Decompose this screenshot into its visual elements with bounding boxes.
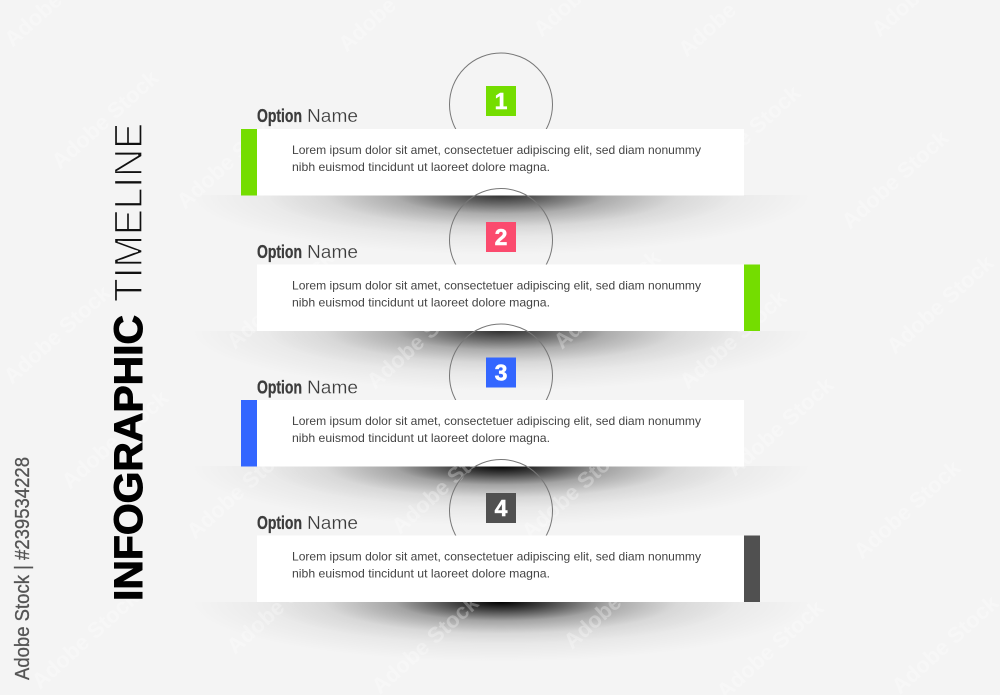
title: timeline: TIMELINE [107, 123, 151, 302]
option name 4: Name [307, 513, 358, 533]
accent 1 [241, 129, 257, 196]
step 2 [257, 188, 760, 331]
card 4 [257, 536, 744, 602]
option name 3 [257, 376, 358, 398]
watermark: Adobe Stock [559, 545, 676, 654]
option name 1: Name [307, 106, 358, 126]
badge 2: 2 [495, 224, 507, 250]
watermark: Adobe Stock [549, 245, 666, 354]
watermark: Adobe Stock [837, 125, 954, 234]
text 4: Lorem ipsum dolor sit amet, consectetuer adipiscing elit, sed diam nonummy [292, 550, 701, 564]
option name 2: Name [307, 242, 358, 262]
watermark: Adobe Stock [517, 435, 634, 544]
step 3 [241, 324, 744, 466]
option name 3: Option [257, 376, 302, 398]
step 1 [241, 53, 744, 196]
text 2: nibh euismod tincidunt ut laoreet dolore magna. [292, 296, 550, 310]
card 3 [257, 400, 744, 466]
text 2: Lorem ipsum dolor sit amet, consectetuer adipiscing elit, sed diam nonummy [292, 278, 701, 292]
accent 4 [744, 536, 760, 602]
text 1 [292, 143, 701, 174]
circle 1 [450, 53, 552, 156]
circle 3 [450, 324, 552, 427]
option name 1 [257, 105, 358, 126]
stock credit: Adobe Stock | #239534228 [12, 457, 34, 680]
card 1 [257, 129, 744, 196]
shadow: card 1 [190, 195, 812, 255]
option name 2 [257, 241, 358, 262]
watermark: Adobe Stock [0, 280, 116, 389]
title: infographic: INFOGRAPHIC [107, 315, 151, 601]
text 1: nibh euismod tincidunt ut laoreet dolore magna. [292, 160, 550, 174]
option name 2: Option [257, 241, 302, 262]
text 4 [292, 550, 701, 580]
accent 3 [241, 400, 257, 466]
badge 1: 1 [495, 88, 508, 114]
card 2 [257, 264, 744, 331]
watermark: Adobe Stock [47, 65, 164, 174]
watermark: Adobe Stock [387, 430, 504, 539]
watermark: Adobe Stock [362, 285, 479, 394]
option name 4 [257, 512, 358, 533]
shadow: card 2 [190, 331, 812, 391]
badge 4: 4 [495, 495, 508, 521]
badge 2 [486, 222, 516, 252]
watermark: Adobe Stock [182, 435, 299, 544]
text 4: nibh euismod tincidunt ut laoreet dolore magna. [292, 566, 550, 580]
watermark: Adobe Stock [882, 250, 999, 359]
accent 2 [744, 264, 760, 331]
text 3: nibh euismod tincidunt ut laoreet dolore magna. [292, 431, 550, 445]
watermark: Adobe Stock [849, 455, 966, 564]
shadow: card 4 [190, 602, 812, 662]
option name 3: Name [307, 378, 358, 398]
badge 4 [486, 493, 516, 523]
text 2 [292, 278, 701, 310]
title [107, 123, 151, 601]
shadow: card 3 [190, 466, 812, 526]
badge 1 [486, 86, 516, 116]
badge 3 [486, 358, 516, 388]
watermark: Adobe Stock [222, 550, 339, 659]
watermark: Adobe Stock [222, 245, 339, 354]
watermark: Adobe Stock [57, 385, 174, 494]
circle 4 [450, 460, 552, 562]
watermark: Adobe Stock [27, 585, 144, 694]
text 3 [292, 414, 701, 445]
option name 1: Option [257, 105, 302, 126]
watermark: Adobe Stock [689, 80, 806, 189]
watermark: Adobe Stock [172, 105, 289, 214]
text 1: Lorem ipsum dolor sit amet, consectetuer adipiscing elit, sed diam nonummy [292, 143, 701, 157]
watermark: Adobe Stock [722, 372, 839, 481]
badge 3: 3 [495, 360, 507, 386]
option name 4: Option [257, 512, 302, 533]
circle 2 [450, 188, 552, 292]
watermark: Adobe Stock [675, 285, 792, 394]
text 3: Lorem ipsum dolor sit amet, consectetuer adipiscing elit, sed diam nonummy [292, 414, 701, 428]
step 4 [257, 460, 760, 602]
